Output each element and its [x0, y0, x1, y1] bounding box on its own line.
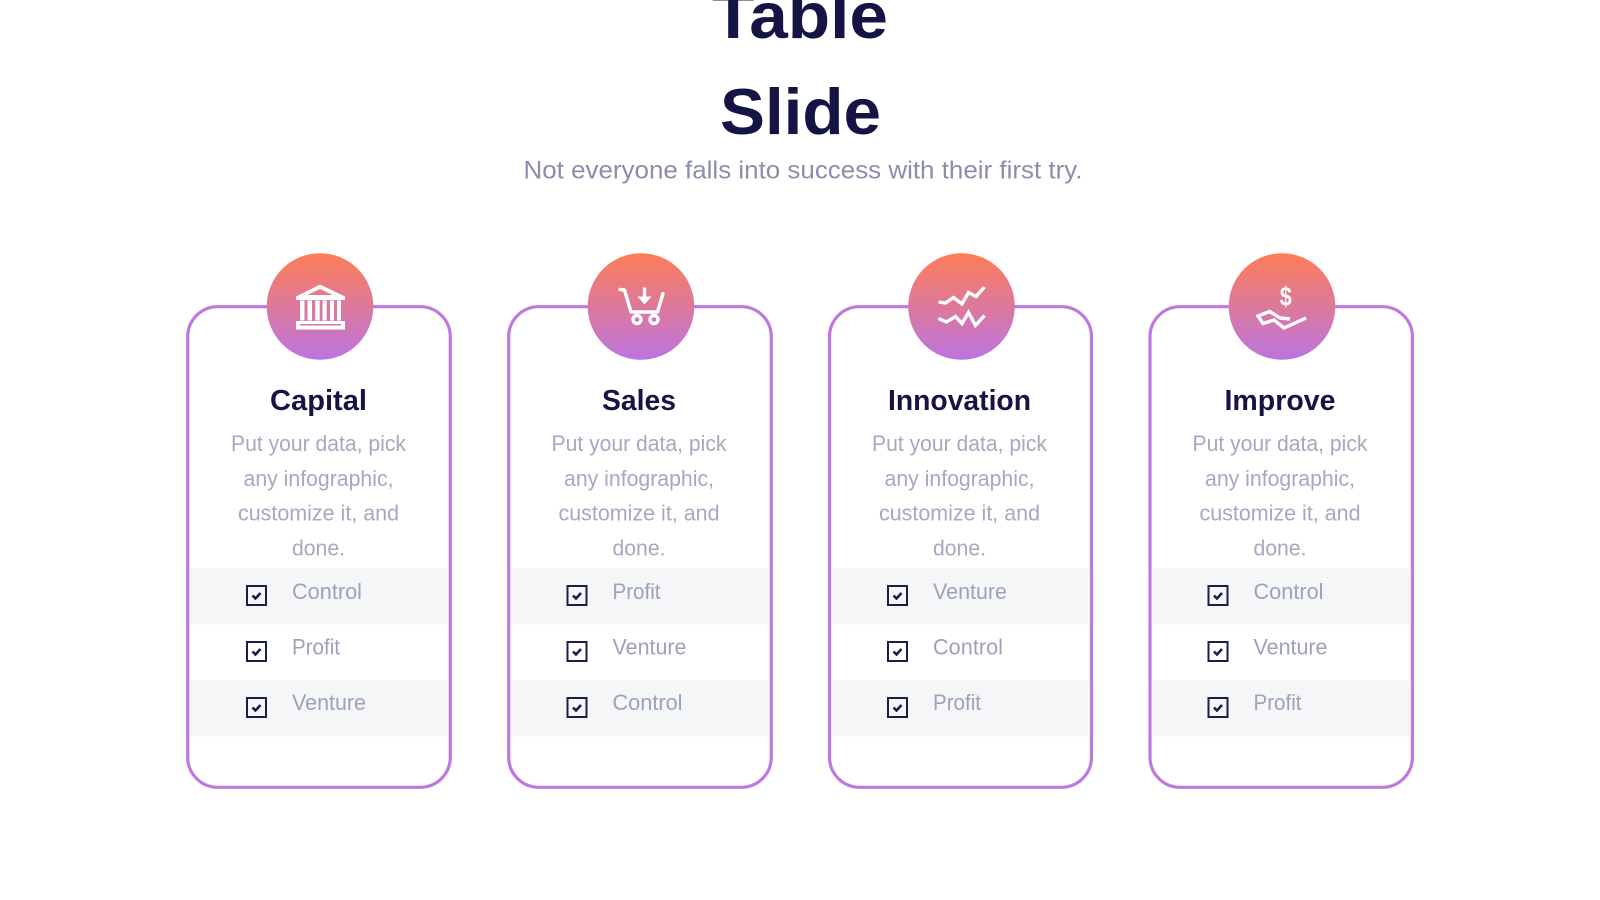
feature list: Profit — [933, 690, 981, 715]
heading: Capital — [270, 385, 367, 417]
heading: Sales — [602, 385, 676, 417]
feature list: Control — [933, 634, 1003, 660]
feature list — [888, 579, 1007, 717]
feature rows background — [510, 568, 770, 736]
description — [552, 431, 727, 560]
feature list: Control — [1254, 579, 1324, 604]
description: any infographic, — [564, 466, 714, 491]
heading: Innovation — [888, 385, 1031, 417]
feature list: Venture — [612, 634, 686, 660]
description: done. — [1254, 536, 1306, 560]
title: Slide — [720, 75, 881, 148]
feature list: Control — [292, 579, 362, 604]
panel: Capital — [188, 253, 450, 787]
description: done. — [612, 536, 666, 560]
description: any infographic, — [1205, 466, 1355, 491]
feature rows background — [831, 568, 1090, 736]
feature rows background — [1152, 568, 1411, 736]
feature list — [1208, 579, 1328, 717]
description: any infographic, — [244, 466, 394, 491]
description — [231, 431, 407, 560]
feature list: Venture — [1254, 634, 1328, 660]
subtitle: Not everyone falls into success with their first try. — [524, 156, 1082, 184]
description — [1192, 431, 1368, 560]
feature list: Venture — [933, 579, 1007, 604]
description: customize it, and — [1200, 500, 1360, 526]
description: any infographic, — [884, 466, 1034, 491]
description: done. — [292, 536, 345, 560]
feature list — [247, 579, 366, 717]
description — [872, 431, 1048, 560]
heading: Improve — [1224, 385, 1336, 417]
icon: hand with dollar — [1229, 253, 1335, 360]
title — [712, 0, 888, 148]
description: done. — [933, 536, 986, 560]
description: customize it, and — [238, 500, 399, 526]
feature list: Profit — [1254, 690, 1302, 715]
feature rows background — [189, 568, 449, 736]
icon: zigzag trend lines — [908, 253, 1015, 360]
icon: bank — [267, 253, 373, 360]
feature list: Profit — [612, 579, 660, 604]
feature list: Profit — [292, 634, 340, 660]
panel: Sales — [509, 253, 771, 787]
panel: Innovation — [830, 253, 1092, 787]
feature list — [568, 579, 686, 717]
icon: shopping cart — [588, 253, 694, 360]
feature list: Venture — [292, 690, 366, 715]
description: Put your data, pick — [1192, 431, 1368, 456]
description: Put your data, pick — [872, 431, 1048, 456]
description: Put your data, pick — [231, 431, 407, 456]
icon: hand with dollar: $ — [1280, 282, 1292, 312]
panel: Improve — [1150, 253, 1412, 787]
description: Put your data, pick — [552, 431, 727, 456]
feature list: Control — [612, 690, 682, 715]
description: customize it, and — [879, 500, 1040, 526]
description: customize it, and — [558, 500, 720, 526]
